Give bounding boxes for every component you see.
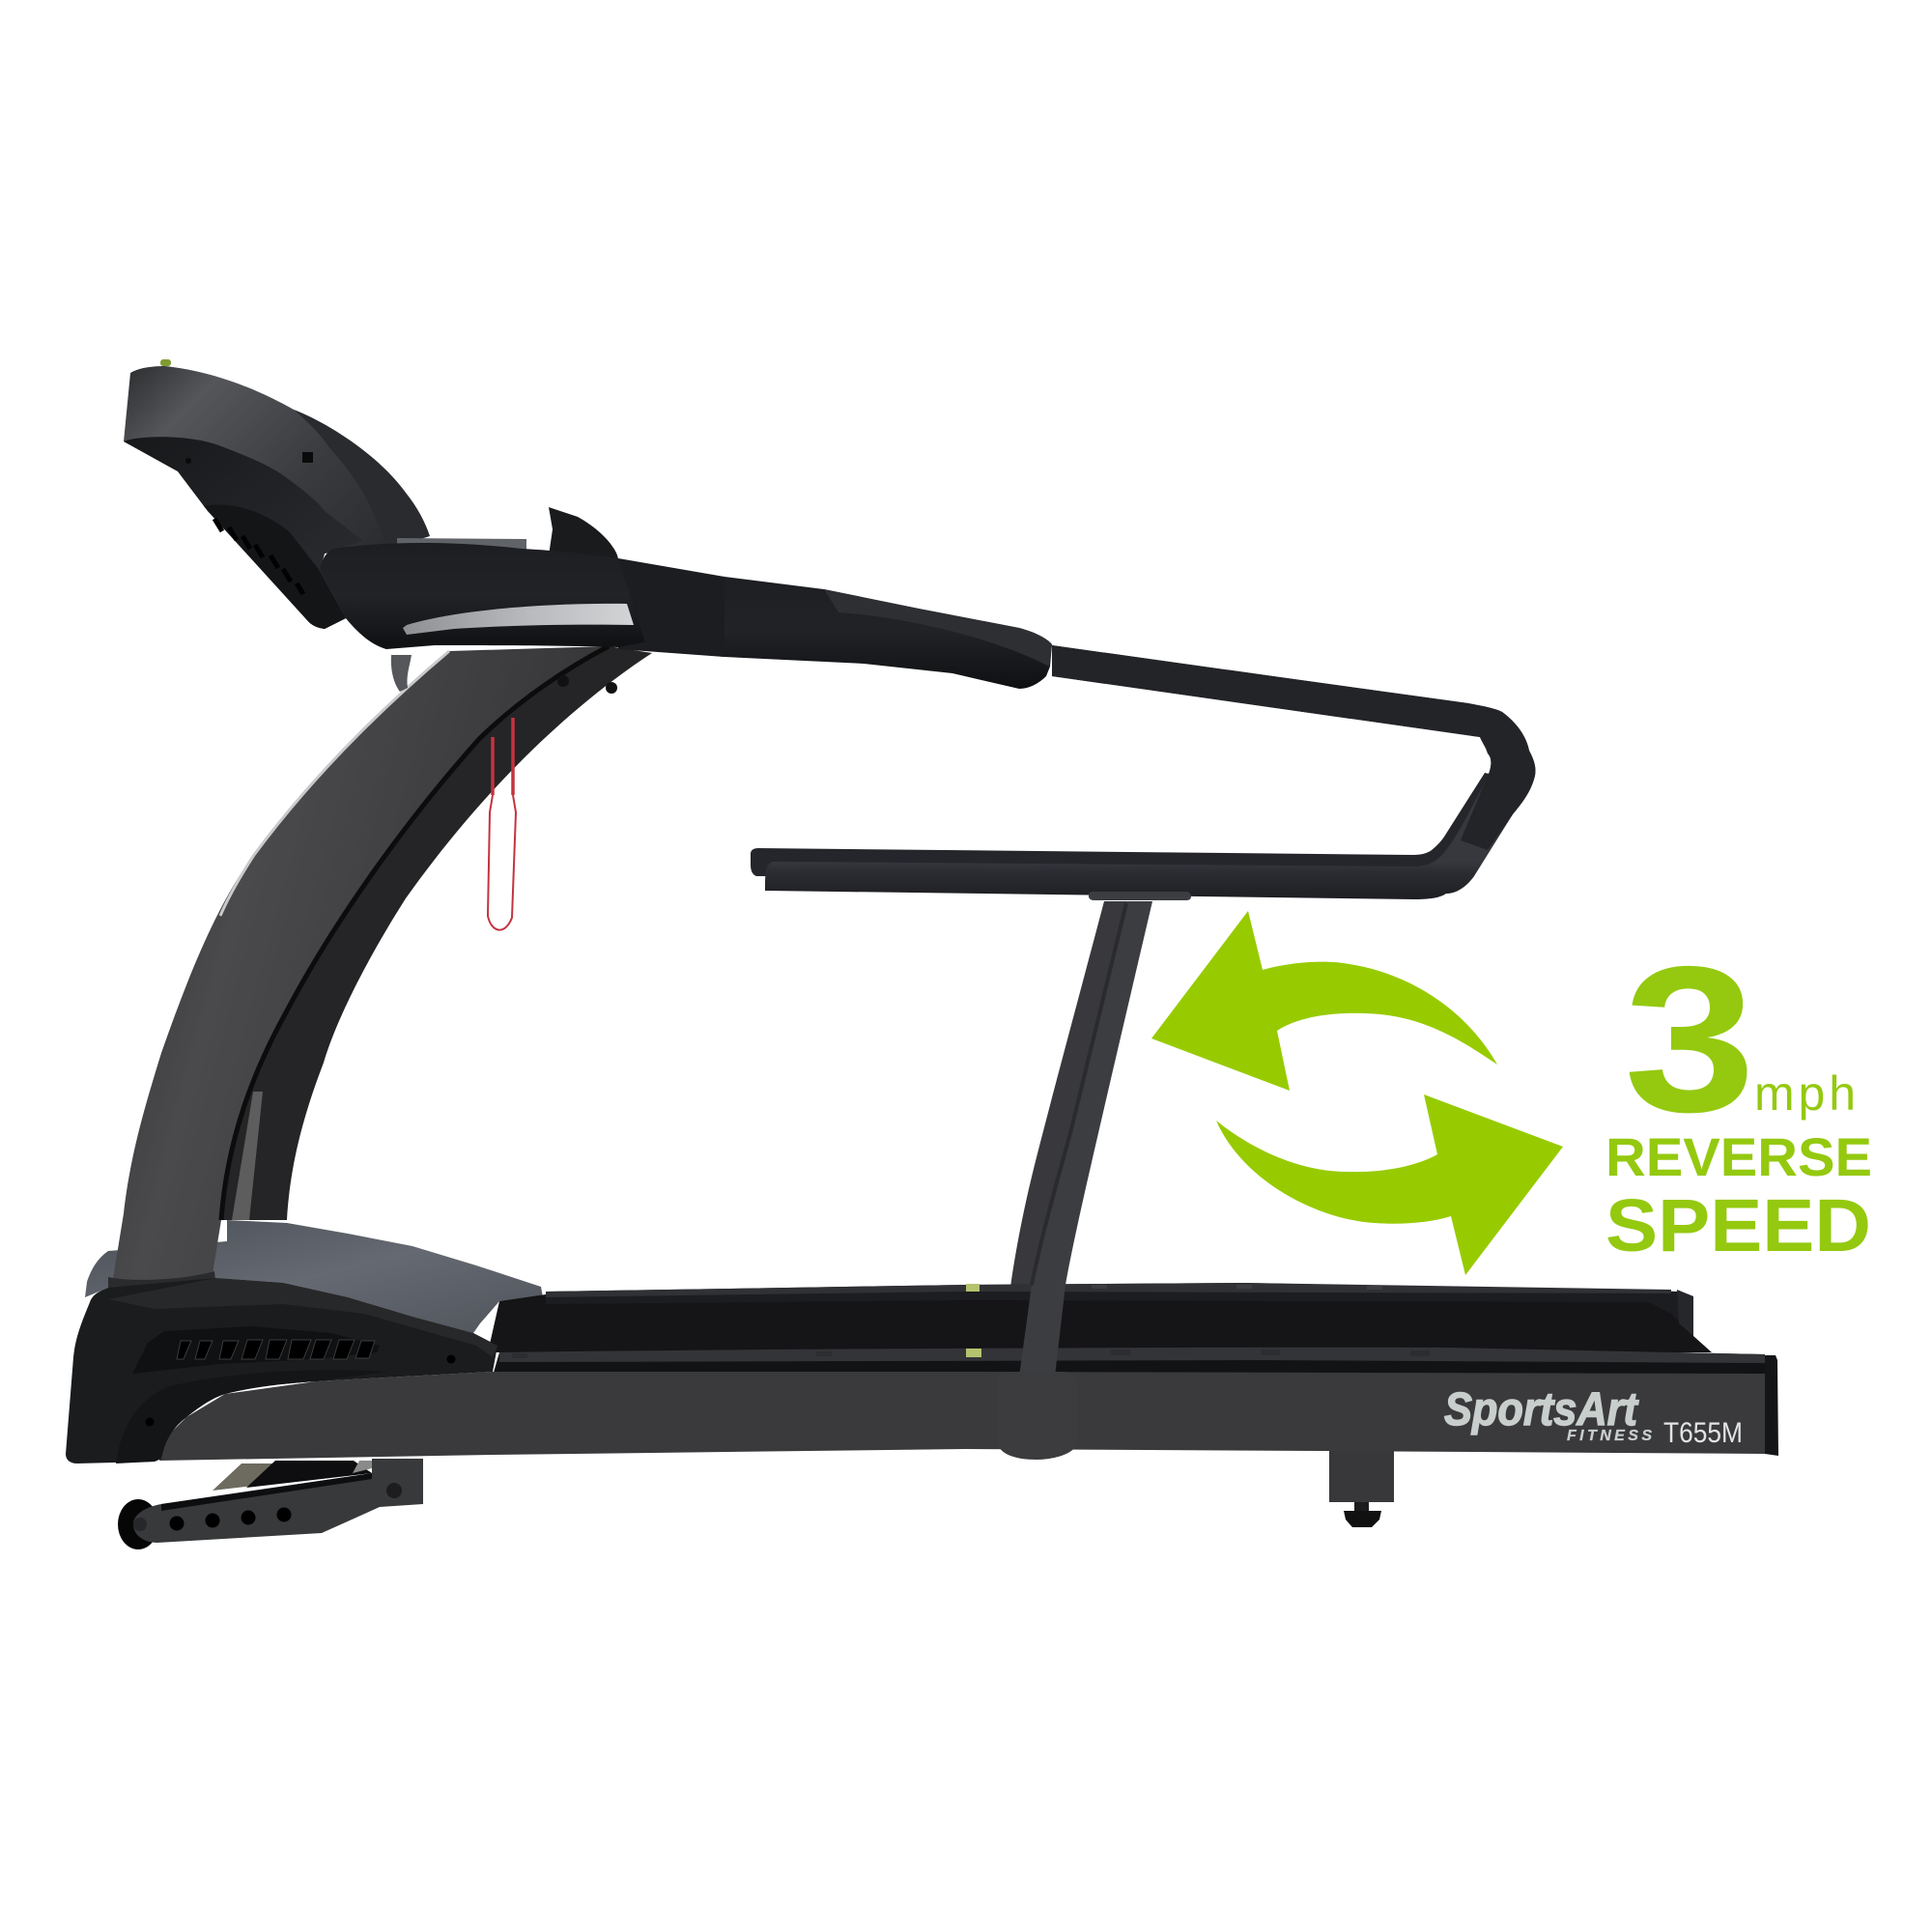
callout: 3 mph reverse speed <box>1605 923 1872 1267</box>
icon: red safety cord <box>488 718 516 930</box>
callout: 3 mph reverse speed: 3 <box>1624 923 1755 1155</box>
icon: rear hinge and wheel <box>118 1459 423 1549</box>
icon: rear leveling foot <box>1329 1451 1394 1527</box>
label: model number: T655M <box>1663 1417 1743 1449</box>
icon: arch collar <box>108 1271 215 1293</box>
callout: 3 mph reverse speed: mph <box>1754 1066 1856 1121</box>
icon: handlebar display unit <box>549 507 618 560</box>
icon: handrail support post <box>997 892 1191 1460</box>
icon: far side rail <box>546 1283 1693 1336</box>
callout: 3 mph reverse speed: SPEED <box>1605 1184 1871 1267</box>
icon: side frame panel <box>159 1355 1778 1461</box>
icon: front base housing <box>66 1278 497 1463</box>
logo: SportsArt Fitness: FITNESS <box>1567 1428 1652 1444</box>
icon: far post tube <box>1009 901 1128 1294</box>
icon: upper arm cover <box>618 570 1052 689</box>
icon: front handlebar housing <box>320 538 724 657</box>
icon: curved support arch <box>111 646 652 1290</box>
arrow: forward direction <box>1216 1094 1563 1275</box>
icon: main handrail grip <box>765 645 1535 899</box>
icon: running belt <box>488 1287 1712 1352</box>
icon: safety clip hook <box>391 655 412 692</box>
icon: motor cover <box>85 1220 543 1333</box>
icon: rear console pod <box>124 359 430 629</box>
arrow: reverse direction <box>1151 911 1497 1091</box>
logo: SportsArt Fitness: SportsArt <box>1444 1384 1639 1435</box>
callout: 3 mph reverse speed: REVERSE <box>1605 1126 1872 1187</box>
icon: upper rail section <box>1052 645 1535 850</box>
icon: far side handrail <box>751 773 1507 884</box>
icon: near side rail <box>493 1348 1765 1376</box>
